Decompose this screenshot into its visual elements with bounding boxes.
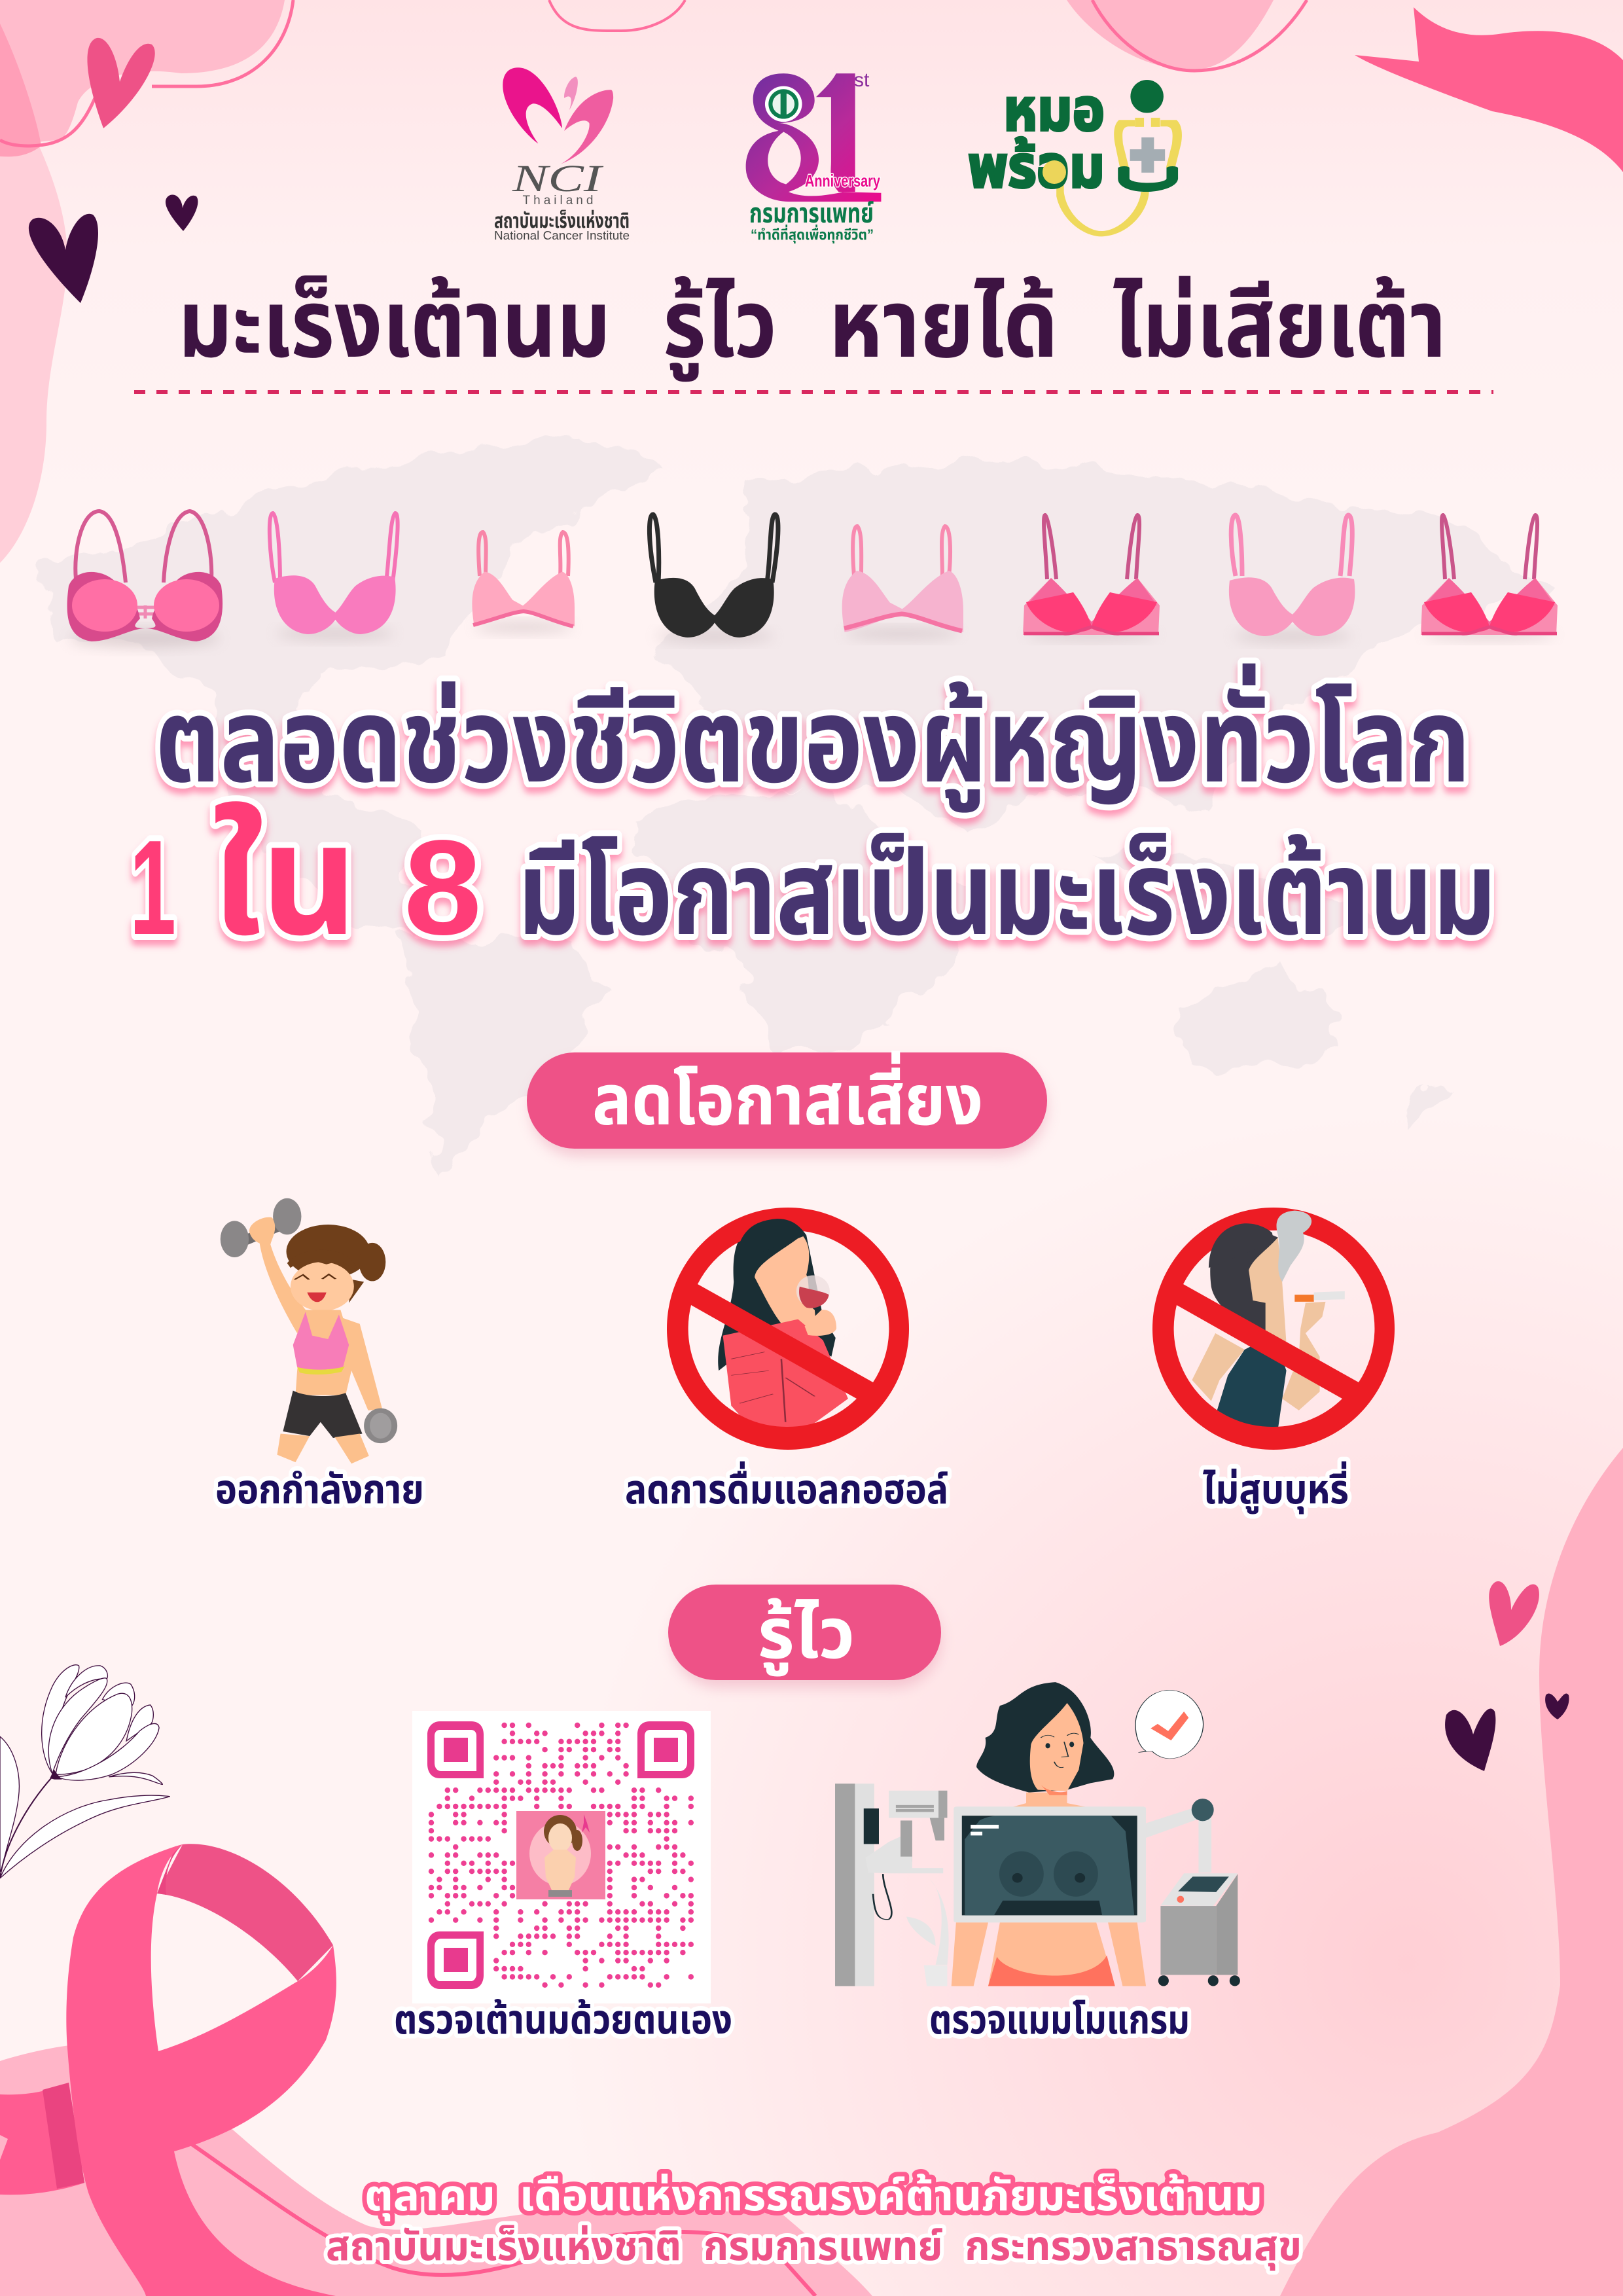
title: ไม่เสียเต้า <box>1113 271 1446 377</box>
mammogram machine column <box>835 1784 947 1986</box>
heart: pink right <box>1489 1581 1539 1646</box>
title <box>178 271 1446 382</box>
logo text: slogan: “ทำดีที่สุดเพื่อทุกชีวิต” <box>751 224 874 243</box>
x-ray screen <box>954 1806 1146 1922</box>
heart: dark small left <box>166 194 198 231</box>
icon: no alcohol <box>667 1208 909 1450</box>
footer line 2: สถาบันมะเร็งแห่งชาติ กรมการแพทย์ กระทรวงสาธารณสุข <box>326 2224 1302 2270</box>
heart: dark right <box>1445 1708 1495 1771</box>
speech bubble with check <box>1135 1690 1204 1759</box>
logo text: Prom: พร้อม <box>968 135 1105 200</box>
headline <box>130 663 1496 967</box>
bra 6 <box>1023 515 1160 640</box>
label: mammogram: ตรวจแมมโมแกรม <box>929 1998 1190 2043</box>
footer line 1: ตุลาคม เดือนแห่งการรณรงค์ต้านภัยมะเร็งเต้านม <box>365 2171 1262 2221</box>
heart: dark large left <box>29 214 98 303</box>
bra 7 <box>1229 515 1355 643</box>
bra 5 <box>842 526 963 639</box>
title: หายได้ <box>829 271 1058 377</box>
logo text: st: st <box>854 69 870 91</box>
bra 4 black <box>649 514 778 643</box>
logo: stethoscope chest piece <box>1043 160 1066 184</box>
pill: know early <box>668 1585 941 1688</box>
logo text: NCI Thai name: สถาบันมะเร็งแห่งชาติ <box>494 209 630 232</box>
QR data dots <box>431 1725 691 1985</box>
logo text: NCI Thailand: Thailand <box>523 194 596 207</box>
bra 1 polka dot <box>67 511 223 647</box>
logo text: Mor: หมอ <box>1003 78 1105 143</box>
pill: know early: รู้ไว <box>758 1594 855 1677</box>
icon: no smoking <box>1152 1208 1395 1450</box>
awareness ribbon <box>0 1844 872 2296</box>
headline: 8: 8 <box>404 812 482 963</box>
logo: 81st anniversary <box>746 73 881 202</box>
title: มะเร็งเต้านม <box>178 271 611 377</box>
logo text: Department of Medical Services: กรมการแพทย์ <box>749 198 874 228</box>
QR finder patterns <box>427 1721 694 1989</box>
plant <box>906 1879 949 1965</box>
heart: dark small right <box>1545 1693 1569 1719</box>
flower line art <box>0 1665 170 1878</box>
world map watermark <box>46 440 1543 1177</box>
logo text: NCI script: NCI <box>512 157 604 200</box>
icon: exercising woman <box>221 1198 397 1463</box>
headline: in: ใน <box>212 792 357 967</box>
QR centre picture <box>516 1811 605 1899</box>
label: reduce alcohol: ลดการดื่มแอลกอฮอล์ <box>625 1461 948 1513</box>
label: exercise: ออกกำลังกาย <box>215 1467 424 1513</box>
pill: reduce risk: ลดโอกาสเสี่ยง <box>592 1051 983 1139</box>
logo: Mor Prom stethoscope <box>1056 80 1182 236</box>
bra 2 <box>270 513 398 640</box>
lower body <box>952 1922 1146 1986</box>
QR code <box>412 1711 711 2003</box>
woman <box>976 1682 1114 1807</box>
label: no smoking: ไม่สูบบุหรี่ <box>1203 1461 1349 1515</box>
label: self exam: ตรวจเต้านมด้วยตนเอง <box>394 1998 732 2043</box>
bra 8 <box>1421 515 1558 640</box>
logo: National Cancer Institute <box>503 67 613 164</box>
heart: pink top-left <box>87 38 155 128</box>
console arm <box>1146 1807 1211 1873</box>
bra 3 <box>472 532 575 633</box>
pill: reduce risk <box>527 1051 1047 1157</box>
headline: 1: 1 <box>130 812 176 963</box>
logos <box>503 67 1182 236</box>
logo text: Anniversary: Anniversary <box>805 171 880 190</box>
logo text: NCI English name: National Cancer Institute <box>494 229 630 242</box>
bra row <box>67 511 1558 647</box>
title: รู้ไว <box>663 271 777 382</box>
icon: mammogram illustration <box>835 1682 1240 1986</box>
console cart <box>1158 1873 1240 1986</box>
